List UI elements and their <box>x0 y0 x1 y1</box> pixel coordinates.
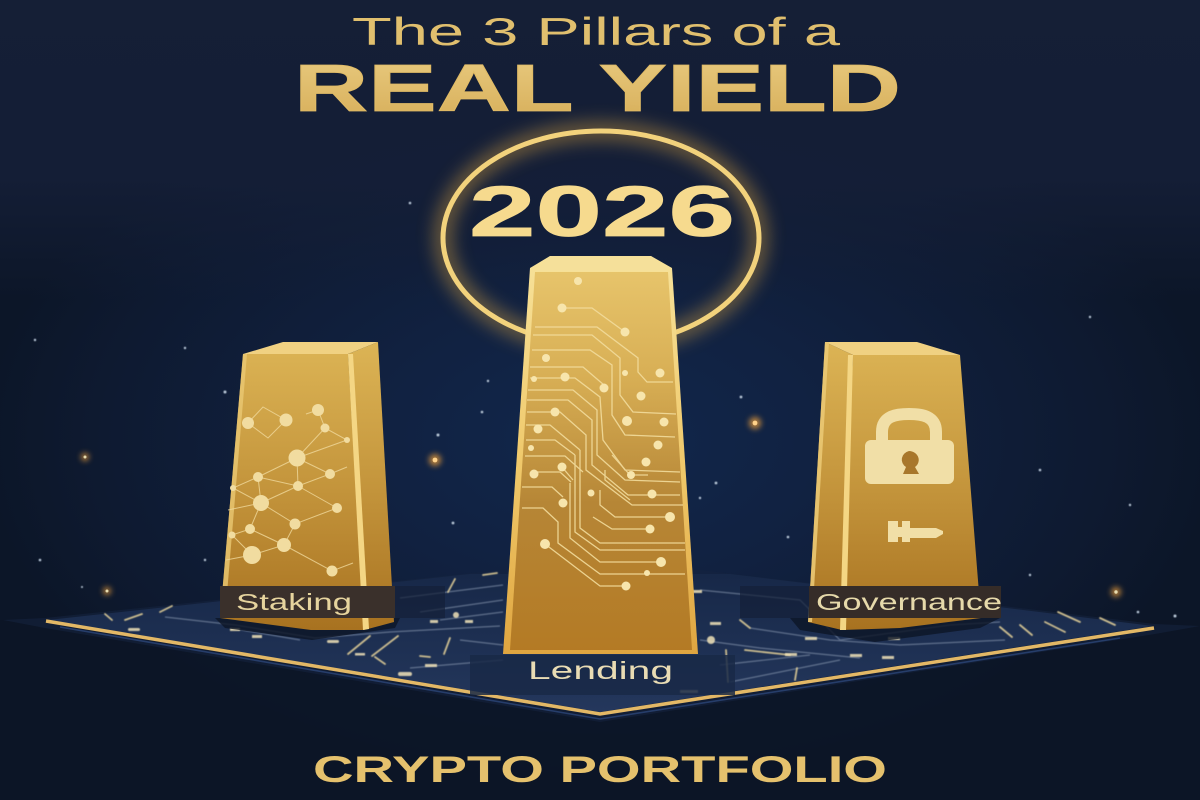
pillar: Governance <box>790 342 1000 642</box>
pillar shadow <box>215 618 400 640</box>
circuit traces <box>522 308 685 586</box>
pillar: Staking <box>215 342 400 640</box>
pillar: Lending <box>470 256 735 695</box>
label: Lending: Lending <box>528 657 673 685</box>
title line: The 3 Pillars of a: The 3 Pillars of a <box>352 11 841 54</box>
icon: padlock <box>865 414 954 484</box>
title line: REAL YIELD: REAL YIELD <box>294 51 901 126</box>
platform circuit traces <box>165 585 1005 682</box>
circuit board platform <box>3 570 1200 722</box>
circuit nodes <box>528 277 675 590</box>
glowing ring with 2026 <box>443 131 759 345</box>
star particles <box>34 202 1176 617</box>
label: Governance <box>740 586 1002 618</box>
label: Staking <box>220 586 445 618</box>
year 2026: 2026 <box>469 173 735 252</box>
icon: key <box>888 521 943 542</box>
subtitle: CRYPTO PORTFOLIO: CRYPTO PORTFOLIO <box>313 749 887 790</box>
icon: staking network <box>226 407 353 571</box>
label: Staking: Staking <box>236 589 352 615</box>
label: Governance: Governance <box>816 589 1002 615</box>
gold platform edge <box>46 621 1154 714</box>
